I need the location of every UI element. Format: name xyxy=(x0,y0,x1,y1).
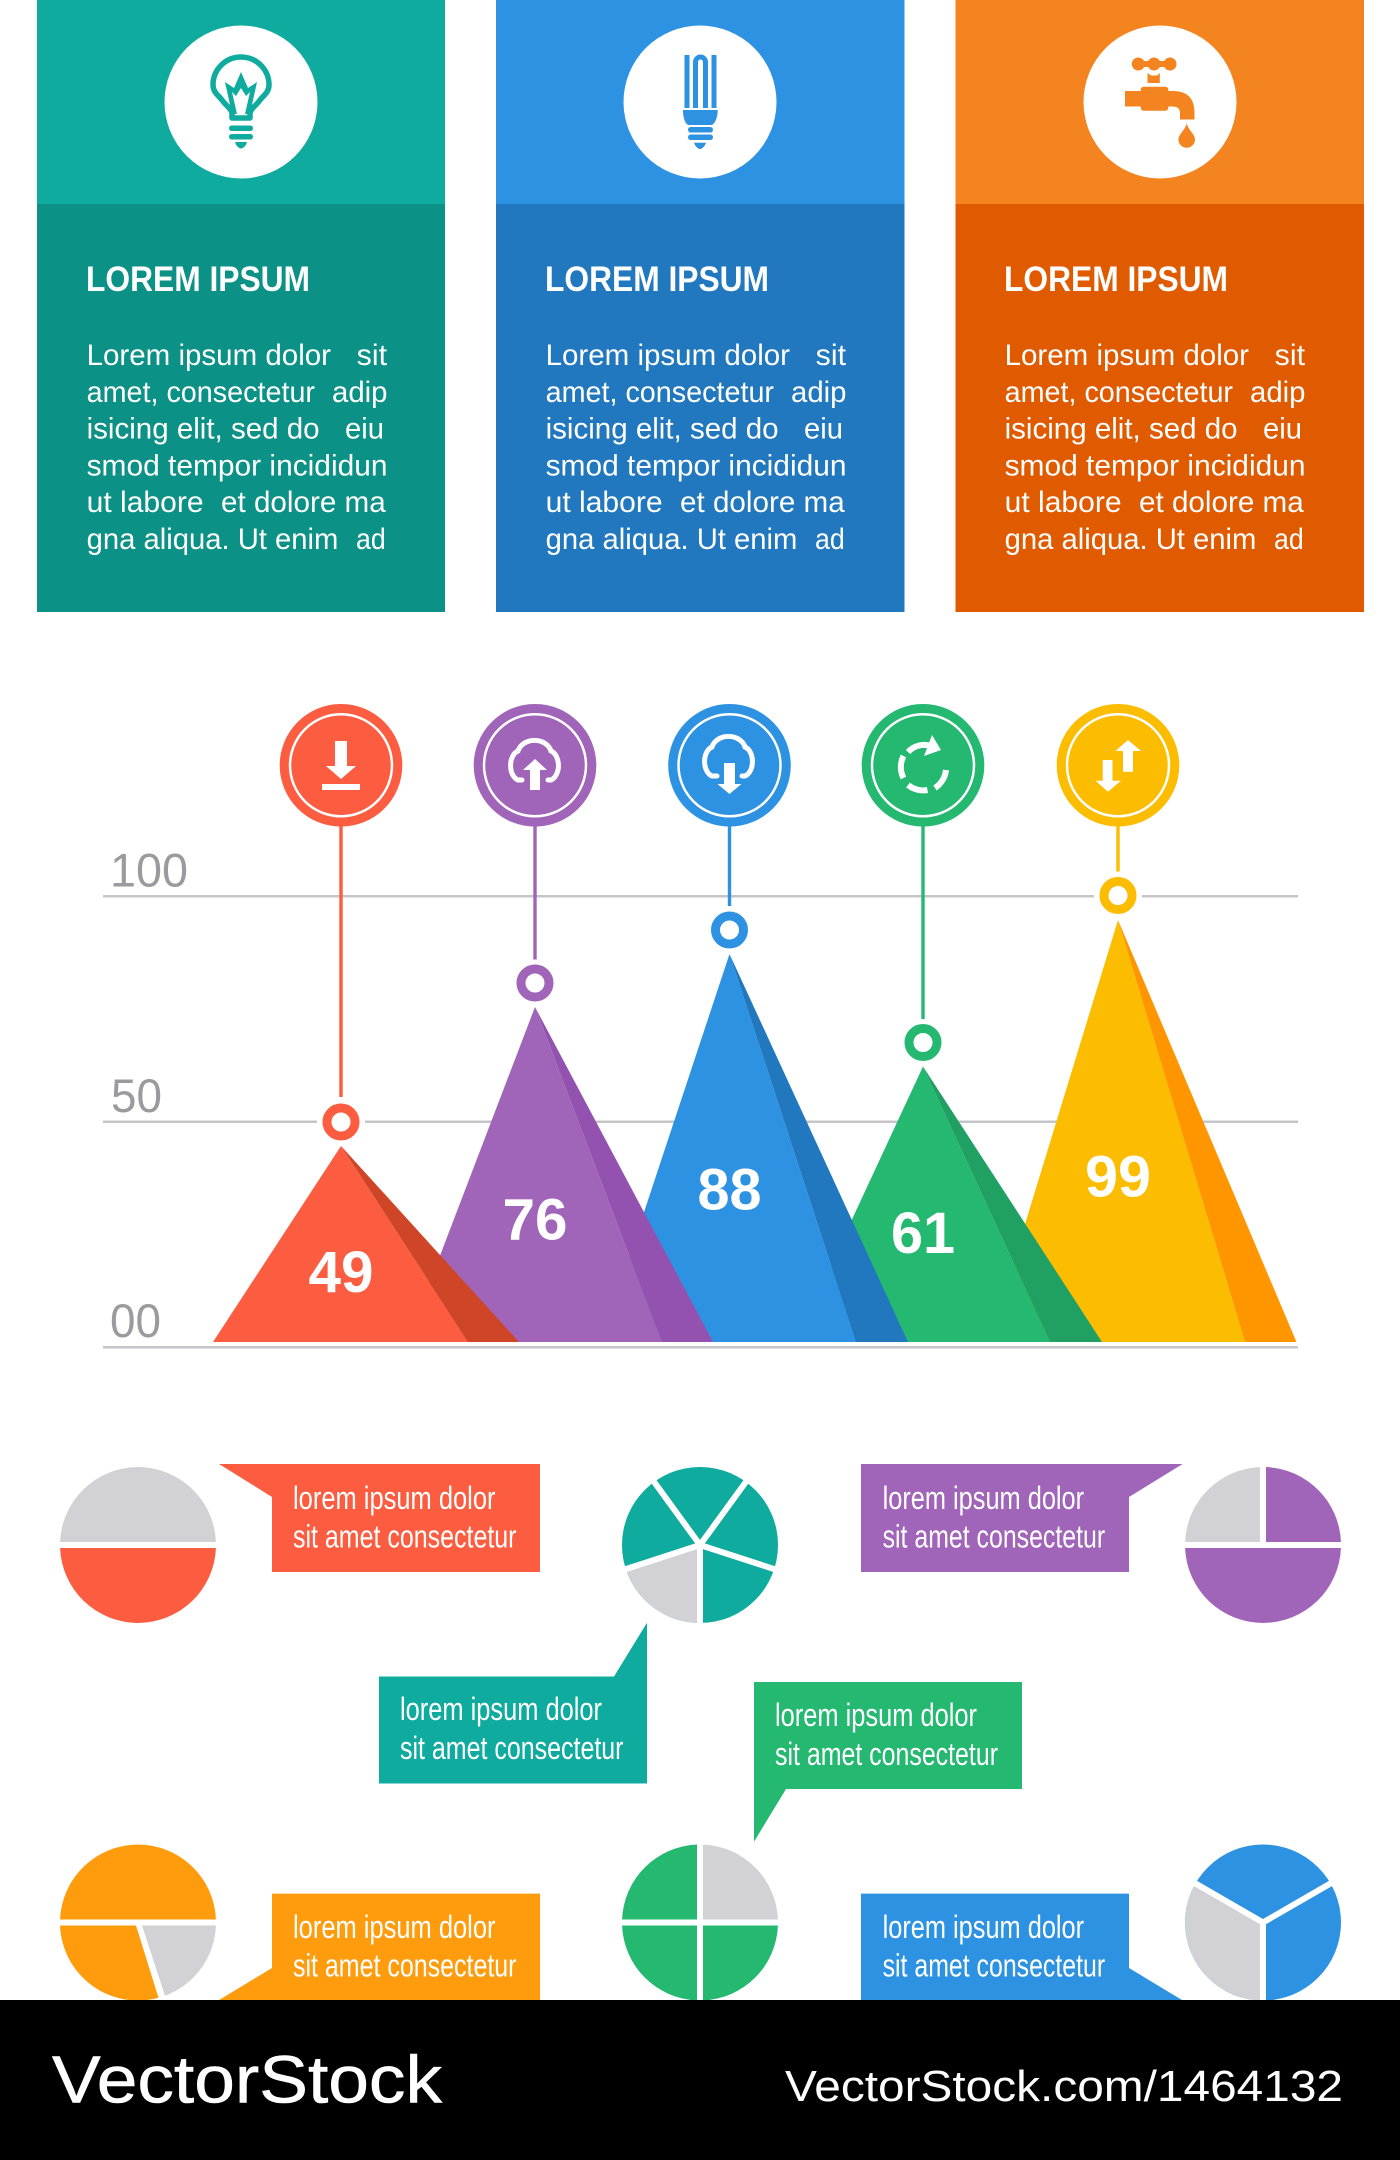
green triangle 61 xyxy=(795,1066,1102,1342)
heading: LOREM IPSUM xyxy=(545,260,769,299)
yellow triangle 99: 99 xyxy=(1085,1144,1151,1210)
body text: isicing elit, sed do xyxy=(546,413,779,446)
green triangle 61: 61 xyxy=(891,1201,955,1266)
marker: blue cloud download xyxy=(668,704,791,944)
panel body xyxy=(496,204,904,612)
body text: adip xyxy=(1250,376,1306,409)
purple triangle 76 xyxy=(407,1007,713,1342)
red triangle 49 xyxy=(213,1146,519,1342)
triangle chart xyxy=(103,704,1298,1348)
blue triangle 88 xyxy=(601,954,908,1342)
panel: orange card xyxy=(956,0,1364,612)
callout: teal: lorem ipsum dolor xyxy=(400,1691,602,1727)
marker: yellow up and down arrows xyxy=(1057,704,1179,920)
body text: gna aliqua. Ut enim xyxy=(546,523,797,556)
body text: sit xyxy=(1275,339,1306,372)
marker: red download xyxy=(280,704,402,1146)
body text: gna aliqua. Ut enim xyxy=(1005,523,1256,556)
body text: sit xyxy=(357,339,388,372)
callout: orange xyxy=(219,1894,540,2000)
body text: ut labore xyxy=(87,486,204,519)
callout: purple: lorem ipsum dolor xyxy=(883,1480,1084,1516)
axis label 50: 50 xyxy=(111,1069,162,1122)
callout: blue: sit amet consectetur xyxy=(883,1948,1105,1984)
body text: adip xyxy=(332,376,388,409)
pie: purple three quarters xyxy=(1185,1467,1341,1623)
body text: amet, consectetur xyxy=(1005,376,1233,409)
body text: eiu xyxy=(1263,413,1302,446)
callout: teal: sit amet consectetur xyxy=(400,1730,624,1766)
callout: red: sit amet consectetur xyxy=(293,1518,517,1554)
heading: LOREM IPSUM xyxy=(1004,260,1228,299)
panel: teal card xyxy=(37,0,445,612)
body text xyxy=(546,339,847,556)
marker: green refresh xyxy=(862,704,984,1056)
body text: eiu xyxy=(345,413,384,446)
callout: teal xyxy=(379,1623,647,1784)
icon: light bulb xyxy=(164,26,318,178)
footer band xyxy=(0,2000,1400,2160)
purple triangle 76: 76 xyxy=(502,1188,568,1252)
body text: sit xyxy=(816,339,847,372)
yellow triangle 99 xyxy=(989,920,1296,1342)
axis label 100: 100 xyxy=(110,844,188,896)
icon: CFL bulb xyxy=(624,26,776,178)
body text xyxy=(87,339,388,556)
body text: ad xyxy=(1274,523,1304,556)
marker: purple cloud upload xyxy=(474,704,596,997)
body text: et dolore ma xyxy=(680,486,845,519)
body text: smod tempor incididun xyxy=(87,449,387,482)
panel header xyxy=(956,0,1364,204)
pie: green quarters xyxy=(622,1845,778,2000)
axis label 00: 00 xyxy=(110,1294,161,1347)
panel header xyxy=(37,0,445,204)
blue triangle 88: 88 xyxy=(698,1158,762,1222)
body text: ut labore xyxy=(1005,486,1122,519)
body text: gna aliqua. Ut enim xyxy=(87,523,338,556)
panel header xyxy=(496,0,904,204)
panel body xyxy=(37,204,445,612)
callout: orange: lorem ipsum dolor xyxy=(293,1909,496,1945)
panel body xyxy=(956,204,1364,612)
body text: amet, consectetur xyxy=(87,376,315,409)
callout: purple xyxy=(861,1464,1183,1572)
body text: Lorem ipsum dolor xyxy=(1005,339,1249,372)
body text: et dolore ma xyxy=(1139,486,1304,519)
body text: et dolore ma xyxy=(221,486,386,519)
footer logo: VectorStock xyxy=(52,2042,443,2118)
body text: isicing elit, sed do xyxy=(1005,413,1238,446)
callout: blue: lorem ipsum dolor xyxy=(883,1909,1084,1945)
heading: LOREM IPSUM xyxy=(86,260,310,299)
callout: red xyxy=(219,1464,540,1572)
footer url: VectorStock.com/1464132 xyxy=(785,2062,1343,2111)
body text: ad xyxy=(815,523,845,556)
body text: ut labore xyxy=(546,486,663,519)
callout: purple: sit amet consectetur xyxy=(883,1518,1105,1554)
body text xyxy=(1005,339,1306,556)
red triangle 49: 49 xyxy=(308,1240,374,1305)
pie: orange with grey wedge xyxy=(60,1845,216,2001)
pie: teal five slices xyxy=(622,1467,778,1626)
pie: blue three slices xyxy=(1185,1844,1341,2003)
icon: water tap xyxy=(1084,26,1236,178)
pie: red half xyxy=(60,1467,216,1623)
callout: red: lorem ipsum dolor xyxy=(293,1480,496,1516)
body text: Lorem ipsum dolor xyxy=(546,339,790,372)
body text: smod tempor incididun xyxy=(1005,449,1305,482)
body text: adip xyxy=(791,376,846,409)
body text: eiu xyxy=(804,413,843,446)
callout: green: lorem ipsum dolor xyxy=(775,1697,977,1733)
body text: ad xyxy=(356,523,386,556)
callout: green xyxy=(754,1682,1022,1842)
callout: blue xyxy=(861,1894,1182,2000)
panel: blue card xyxy=(496,0,904,612)
body text: amet, consectetur xyxy=(546,376,774,409)
body text: isicing elit, sed do xyxy=(87,413,320,446)
body text: smod tempor incididun xyxy=(546,449,846,482)
callout: orange: sit amet consectetur xyxy=(293,1948,517,1984)
body text: Lorem ipsum dolor xyxy=(87,339,331,372)
callout: green: sit amet consectetur xyxy=(775,1736,998,1772)
